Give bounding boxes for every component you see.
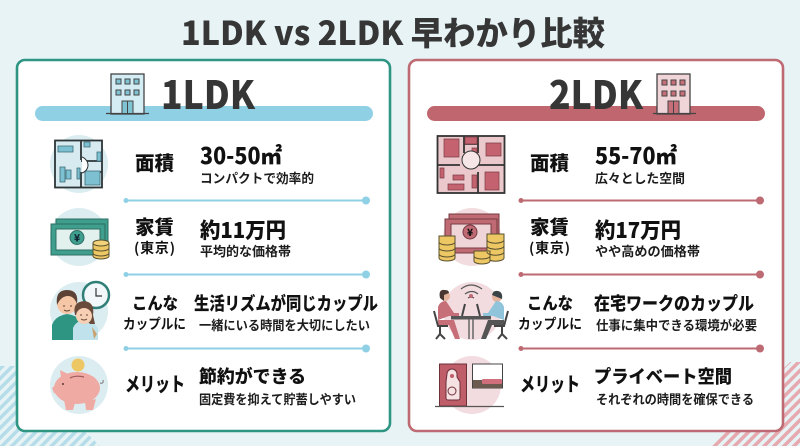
value: rent: 約17万円 [595, 214, 681, 245]
icon: building 1LDK [106, 74, 149, 114]
value: rent: 約11万円 [200, 214, 286, 245]
value: area: 30-50㎡ [200, 137, 282, 171]
row: rent [439, 208, 700, 266]
panel: 1LDK [17, 60, 390, 431]
note: rent: やや高めの価格帯 [595, 241, 700, 260]
icon: building 2LDK [653, 74, 696, 114]
note: rent: 平均的な価格帯 [200, 241, 291, 260]
value: merit: 節約ができる [199, 363, 306, 389]
note: area: コンパクトで効率的 [200, 168, 314, 187]
panel: 2LDK [409, 60, 783, 431]
row: merit [435, 356, 754, 414]
icon: money 1LDK [50, 208, 109, 266]
icon: couple and clock [50, 282, 109, 340]
heading: 1LDK: 1LDK [161, 65, 255, 121]
label: area: 面積 [530, 147, 570, 176]
row: couple [434, 282, 757, 340]
value: couple: 生活リズムが同じカップル [194, 290, 378, 316]
value: merit: プライベート空間 [594, 363, 732, 389]
icon: floor plan 2LDK [437, 136, 505, 193]
note: area: 広々とした空間 [595, 168, 685, 187]
note: merit: 固定費を抑えて貯蓄しやすい [199, 389, 356, 408]
icon: remote work [434, 282, 508, 340]
label: couple: こんな [527, 290, 573, 314]
label: merit: メリット [125, 368, 185, 397]
icon: money 2LDK [439, 208, 504, 266]
row: rent [50, 208, 291, 266]
row: area [437, 136, 685, 193]
value: couple: 在宅ワークのカップル [594, 290, 754, 316]
label: merit: メリット [520, 368, 580, 397]
icon: floor plan 1LDK [50, 135, 108, 193]
row: merit [50, 356, 356, 414]
label: couple [123, 290, 186, 334]
label: rent: 家賃 [530, 211, 569, 240]
heading: 2LDK: 2LDK [549, 65, 643, 121]
header bar: 2LDK [427, 106, 765, 121]
label: couple: カップルに [123, 314, 186, 334]
label: rent: (東京) [134, 238, 175, 258]
label: couple [518, 290, 582, 334]
icon: money 1LDK: ¥ [74, 230, 80, 244]
label: area: 面積 [135, 147, 175, 176]
row: couple [50, 282, 378, 340]
icon: door and private room [435, 356, 504, 414]
note: couple: 一緒にいる時間を大切にしたい [199, 315, 370, 334]
icon: piggy bank [50, 356, 108, 414]
title: 1LDK vs 2LDK 早わかり比較 [181, 7, 605, 55]
icon: money 2LDK: ¥ [467, 224, 473, 239]
label: rent [134, 211, 175, 258]
value: area: 55-70㎡ [595, 137, 677, 171]
label: couple: カップルに [518, 314, 582, 334]
label: rent: (東京) [529, 238, 570, 258]
label: rent [529, 211, 570, 258]
note: couple: 仕事に集中できる環境が必要 [596, 315, 757, 334]
label: rent: 家賃 [135, 211, 174, 240]
header bar: 1LDK [35, 106, 373, 121]
note: merit: それぞれの時間を確保できる [596, 389, 754, 408]
row: area [50, 135, 314, 193]
label: couple: こんな [132, 290, 178, 314]
